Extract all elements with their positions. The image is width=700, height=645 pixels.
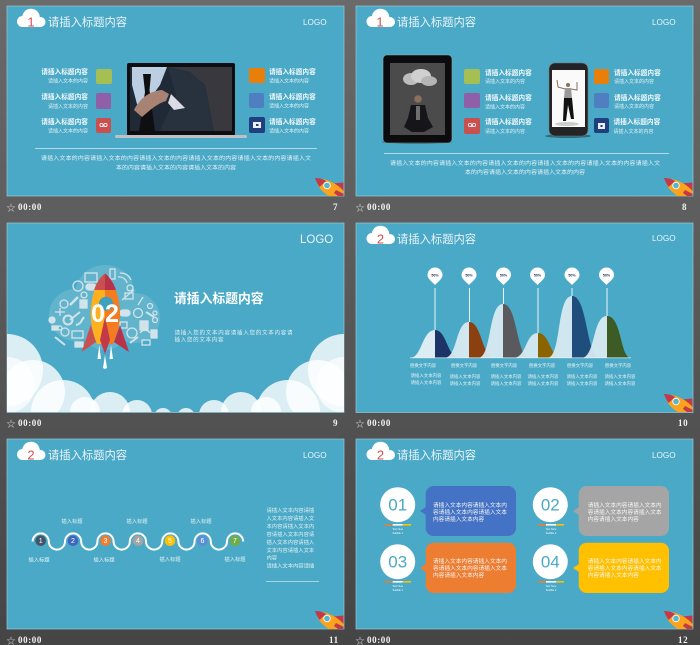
footer 10 [356, 418, 688, 429]
icon: cloud number 2 [366, 442, 395, 462]
icon: rocket [663, 608, 699, 638]
pin 4: 50% [534, 274, 542, 278]
chart labels [410, 362, 636, 387]
card 02: 02 [541, 496, 560, 514]
side text [266, 506, 315, 570]
footer 12: 12 [678, 635, 688, 645]
step labels: 插入标题 [126, 517, 148, 525]
side text: 容请插入文本内容请 [266, 530, 315, 538]
panel: slide 8 [356, 6, 699, 205]
heading: 请插入标题内容 [397, 448, 476, 462]
body text: 本的内容请插入文本的内容请插入文本的内容 [116, 164, 236, 172]
pin 2: 50% [465, 274, 473, 278]
card 01 [380, 486, 516, 536]
left item 2: 请插入文本的内容 [485, 104, 525, 110]
icon: rocket [314, 175, 350, 205]
side text: 本内容请插入文本内 [266, 522, 314, 530]
step 3: 3 [104, 538, 108, 545]
left item 2: 请插入文本的内容 [48, 103, 88, 110]
left item 1: 请插入标题内容 [41, 67, 88, 76]
card 04: Text Here [546, 585, 557, 588]
tablet with photo [382, 55, 452, 144]
card 01: 内容请插入文本内容 [433, 515, 484, 523]
icon: rocket [314, 608, 350, 638]
side text: 插入文本内容请插入 [266, 538, 315, 546]
left item 2: 请插入标题内容 [485, 93, 532, 102]
chart labels: 替换文字内容 [491, 362, 518, 369]
side text: 文本内容请插入文本 [266, 546, 315, 554]
heading: 请插入标题内容 [48, 15, 127, 29]
footer 9: 9 [333, 418, 338, 428]
bell chart [410, 288, 631, 358]
right item 2: 请插入标题内容 [269, 92, 316, 101]
step labels: 插入标题 [224, 555, 246, 563]
card 01: 容请插入文本内容请插入文本 [433, 508, 507, 516]
chart labels: 请插入文本内容 [450, 373, 481, 380]
step 5 [165, 535, 175, 546]
left item 1: 请插入标题内容 [485, 68, 532, 77]
body text [41, 154, 311, 172]
step 3 [100, 535, 111, 546]
step 2: 2 [71, 538, 75, 545]
right item 3: 请插入文本的内容 [269, 128, 309, 134]
clouds [7, 334, 344, 412]
icon: cloud number 1 [366, 9, 395, 29]
icon cloud [49, 265, 160, 350]
chart labels: 请插入文本内容 [605, 380, 636, 387]
footer 8: 00:00 [367, 202, 391, 212]
pin 5: 50% [568, 274, 576, 278]
pin 6 [599, 268, 614, 285]
card 01: Subtitle 1 [392, 532, 404, 535]
chart labels: 请插入文本内容 [450, 380, 481, 387]
left item 2: 请插入标题内容 [41, 92, 88, 101]
footer 12: 00:00 [367, 635, 391, 645]
icon: cloud number 2: 2 [377, 232, 384, 246]
left item 3: 请插入文本的内容 [485, 128, 525, 135]
step labels: 插入标题 [190, 517, 212, 525]
chart labels: 请插入文本内容 [411, 372, 442, 379]
step labels: 插入标题 [93, 556, 115, 564]
pin 1 [428, 268, 442, 285]
phone with photo [545, 63, 591, 138]
logo: LOGO [652, 18, 676, 27]
icon: cloud number 2: 2 [377, 448, 384, 462]
card 04 [533, 543, 669, 593]
right item 3 [594, 117, 661, 135]
panel: slide 10 chart [356, 223, 699, 421]
body text [174, 328, 293, 344]
footer 11: 11 [329, 635, 339, 645]
footer 9: 00:00 [18, 418, 42, 428]
footer 10: ☆ [356, 419, 365, 429]
right item 1 [249, 67, 316, 84]
card 02: 请插入文本内容请插入文本内 [588, 501, 662, 509]
footer 11: 00:00 [18, 635, 42, 645]
body text [390, 159, 660, 176]
left item 2 [464, 93, 532, 110]
icon: rocket [663, 175, 699, 205]
side text: 内容 [266, 554, 278, 562]
right item 2: 请插入文本的内容 [614, 103, 654, 110]
card 01: 请插入文本内容请插入文本内 [433, 501, 507, 509]
step 1: 1 [39, 538, 43, 545]
card 04: 请插入文本内容请插入文本内 [588, 557, 662, 565]
card 03 [380, 543, 516, 593]
chart labels: 请插入文本内容 [491, 373, 522, 380]
left item 1 [464, 68, 532, 85]
wave line [33, 533, 243, 550]
logo: LOGO [300, 234, 333, 246]
right item 1: 请插入文本的内容 [269, 78, 309, 84]
right item 2: 请插入文本的内容 [269, 102, 309, 110]
panel: slide 9 section [6, 222, 344, 413]
body text: 本的内容请插入文本的内容请插入文本的内容 [465, 168, 585, 176]
card 02 [533, 486, 669, 536]
panel: slide 11 timeline [7, 439, 350, 638]
footer 7: 7 [333, 202, 338, 212]
footer 7 [6, 202, 338, 213]
card 03: Subtitle 3 [392, 589, 404, 592]
card 02: Subtitle 2 [546, 532, 557, 535]
right item 3: 请插入标题内容 [269, 117, 316, 126]
heading: 请插入标题内容 [174, 291, 264, 306]
left item 3 [41, 117, 111, 134]
step 7 [230, 535, 240, 546]
card 04: 内容请插入文本内容 [588, 571, 639, 579]
footer 9: ☆ [6, 419, 16, 429]
footer 8: 8 [682, 202, 687, 212]
pin 5 [564, 268, 580, 285]
card 03: 请插入文本内容请插入文本内 [433, 557, 507, 565]
side text: 入文本内容请插入文 [266, 514, 315, 522]
icon: cloud number 1: 1 [27, 14, 35, 30]
footer 7: 00:00 [18, 202, 42, 212]
card 03: 内容请插入文本内容 [433, 571, 484, 579]
right item 1: 请插入标题内容 [614, 68, 661, 77]
card 02: Text Here [546, 528, 557, 531]
card 04: 04 [541, 552, 560, 572]
card 03: 容请插入文本内容请插入文本 [433, 564, 507, 572]
side text: 请插入文本内容请插 [266, 506, 315, 514]
card 03: 03 [388, 552, 407, 572]
footer 8 [356, 202, 687, 213]
step 5: 5 [168, 538, 172, 545]
panel: slide 7 [7, 6, 350, 205]
pin 1: 50% [431, 274, 439, 278]
logo: LOGO [652, 234, 676, 243]
step 2 [68, 535, 78, 546]
laptop with photo [115, 63, 247, 138]
left item 3: 请插入文本的内容 [48, 128, 88, 134]
footer 8: ☆ [356, 203, 365, 213]
right item 2 [249, 92, 316, 110]
icon: cloud number 2: 2 [27, 448, 35, 462]
left item 3: 请插入标题内容 [41, 117, 88, 126]
icon: rocket [663, 391, 699, 421]
pin 6: 50% [603, 274, 611, 278]
step 6: 6 [201, 538, 205, 545]
left item 2 [41, 92, 111, 110]
footer 7: ☆ [6, 203, 16, 213]
pin 3 [496, 268, 511, 285]
chart labels: 请插入文本内容 [528, 380, 559, 387]
footer 11 [6, 635, 339, 645]
panel: slide 12 cards [356, 439, 699, 638]
chart labels: 请插入文本内容 [528, 373, 559, 380]
body text: 请插入您的文本内容请插入您的文本内容请 [174, 328, 293, 336]
section number: 02 [91, 300, 119, 328]
card 04: Subtitle 4 [546, 589, 557, 592]
step 4 [133, 535, 143, 546]
footer 10: 10 [678, 418, 688, 428]
card 04: 容请插入文本内容请插入文本 [588, 564, 662, 572]
pin 4 [530, 268, 545, 285]
logo: LOGO [303, 18, 327, 27]
body text: 请插入文本的内容请插入文本的内容请插入文本的内容请插入文本的内容请插入文本的内容请插入文 [41, 154, 311, 162]
chart labels: 替换文字内容 [410, 362, 437, 369]
right item 1 [594, 68, 661, 85]
body text: 请插入文本的内容请插入文本的内容请插入文本的内容请插入文本的内容请插入文本的内容请插入文 [390, 159, 660, 167]
icon: cloud number 1: 1 [376, 14, 384, 30]
chart labels: 替换文字内容 [605, 362, 632, 369]
pin 2 [462, 268, 476, 285]
heading: 请插入标题内容 [397, 232, 476, 246]
logo: LOGO [303, 451, 327, 460]
body text: 插入您的文本内容 [174, 336, 224, 344]
step labels [28, 517, 246, 564]
card 02: 容请插入文本内容请插入文本 [588, 508, 662, 516]
card 03: Text Here [392, 585, 404, 588]
pin 3: 50% [500, 274, 508, 278]
step 6 [197, 535, 208, 546]
chart labels: 请插入文本内容 [605, 373, 636, 380]
chart labels: 替换文字内容 [567, 362, 594, 369]
left item 1: 请插入文本的内容 [485, 78, 525, 85]
right item 2: 请插入标题内容 [614, 93, 661, 102]
chart labels: 请插入文本内容 [491, 380, 522, 387]
icon: cloud number 2 [17, 442, 46, 462]
chart labels: 替换文字内容 [451, 362, 478, 369]
left item 3: 请插入标题内容 [485, 117, 532, 126]
heading: 请插入标题内容 [48, 448, 127, 462]
chart labels: 请插入文本内容 [567, 373, 598, 380]
footer 10: 00:00 [367, 418, 391, 428]
icon: cloud number 1 [17, 9, 46, 29]
footer 9 [6, 418, 338, 429]
right item 3 [249, 117, 316, 134]
card 01: Text Here [392, 528, 404, 531]
side text: 请插入文本内容请插 [266, 562, 315, 570]
icon: rocket [82, 274, 129, 369]
step labels: 插入标题 [28, 556, 50, 564]
chart labels: 请插入文本内容 [567, 380, 598, 387]
left item 1 [41, 67, 112, 84]
logo: LOGO [652, 451, 676, 460]
step 1 [35, 535, 46, 546]
step labels: 插入标题 [61, 517, 83, 525]
left item 3 [464, 117, 532, 135]
step 4: 4 [136, 538, 140, 545]
card 01: 01 [388, 496, 407, 514]
icon: cloud number 2 [366, 226, 395, 246]
chart labels: 请插入文本内容 [411, 379, 442, 386]
right item 3: 请插入标题内容 [614, 117, 661, 126]
right item 1: 请插入标题内容 [269, 67, 316, 76]
heading: 请插入标题内容 [397, 15, 476, 29]
footer 12 [356, 635, 688, 645]
step labels: 插入标题 [159, 555, 181, 563]
right item 1: 请插入文本的内容 [614, 78, 654, 85]
step 7: 7 [233, 538, 237, 545]
card 02: 内容请插入文本内容 [588, 515, 639, 523]
chart labels: 替换文字内容 [529, 362, 556, 369]
right item 3: 请插入文本的内容 [614, 128, 654, 135]
left item 1: 请插入文本的内容 [48, 78, 88, 84]
right item 2 [594, 93, 661, 110]
